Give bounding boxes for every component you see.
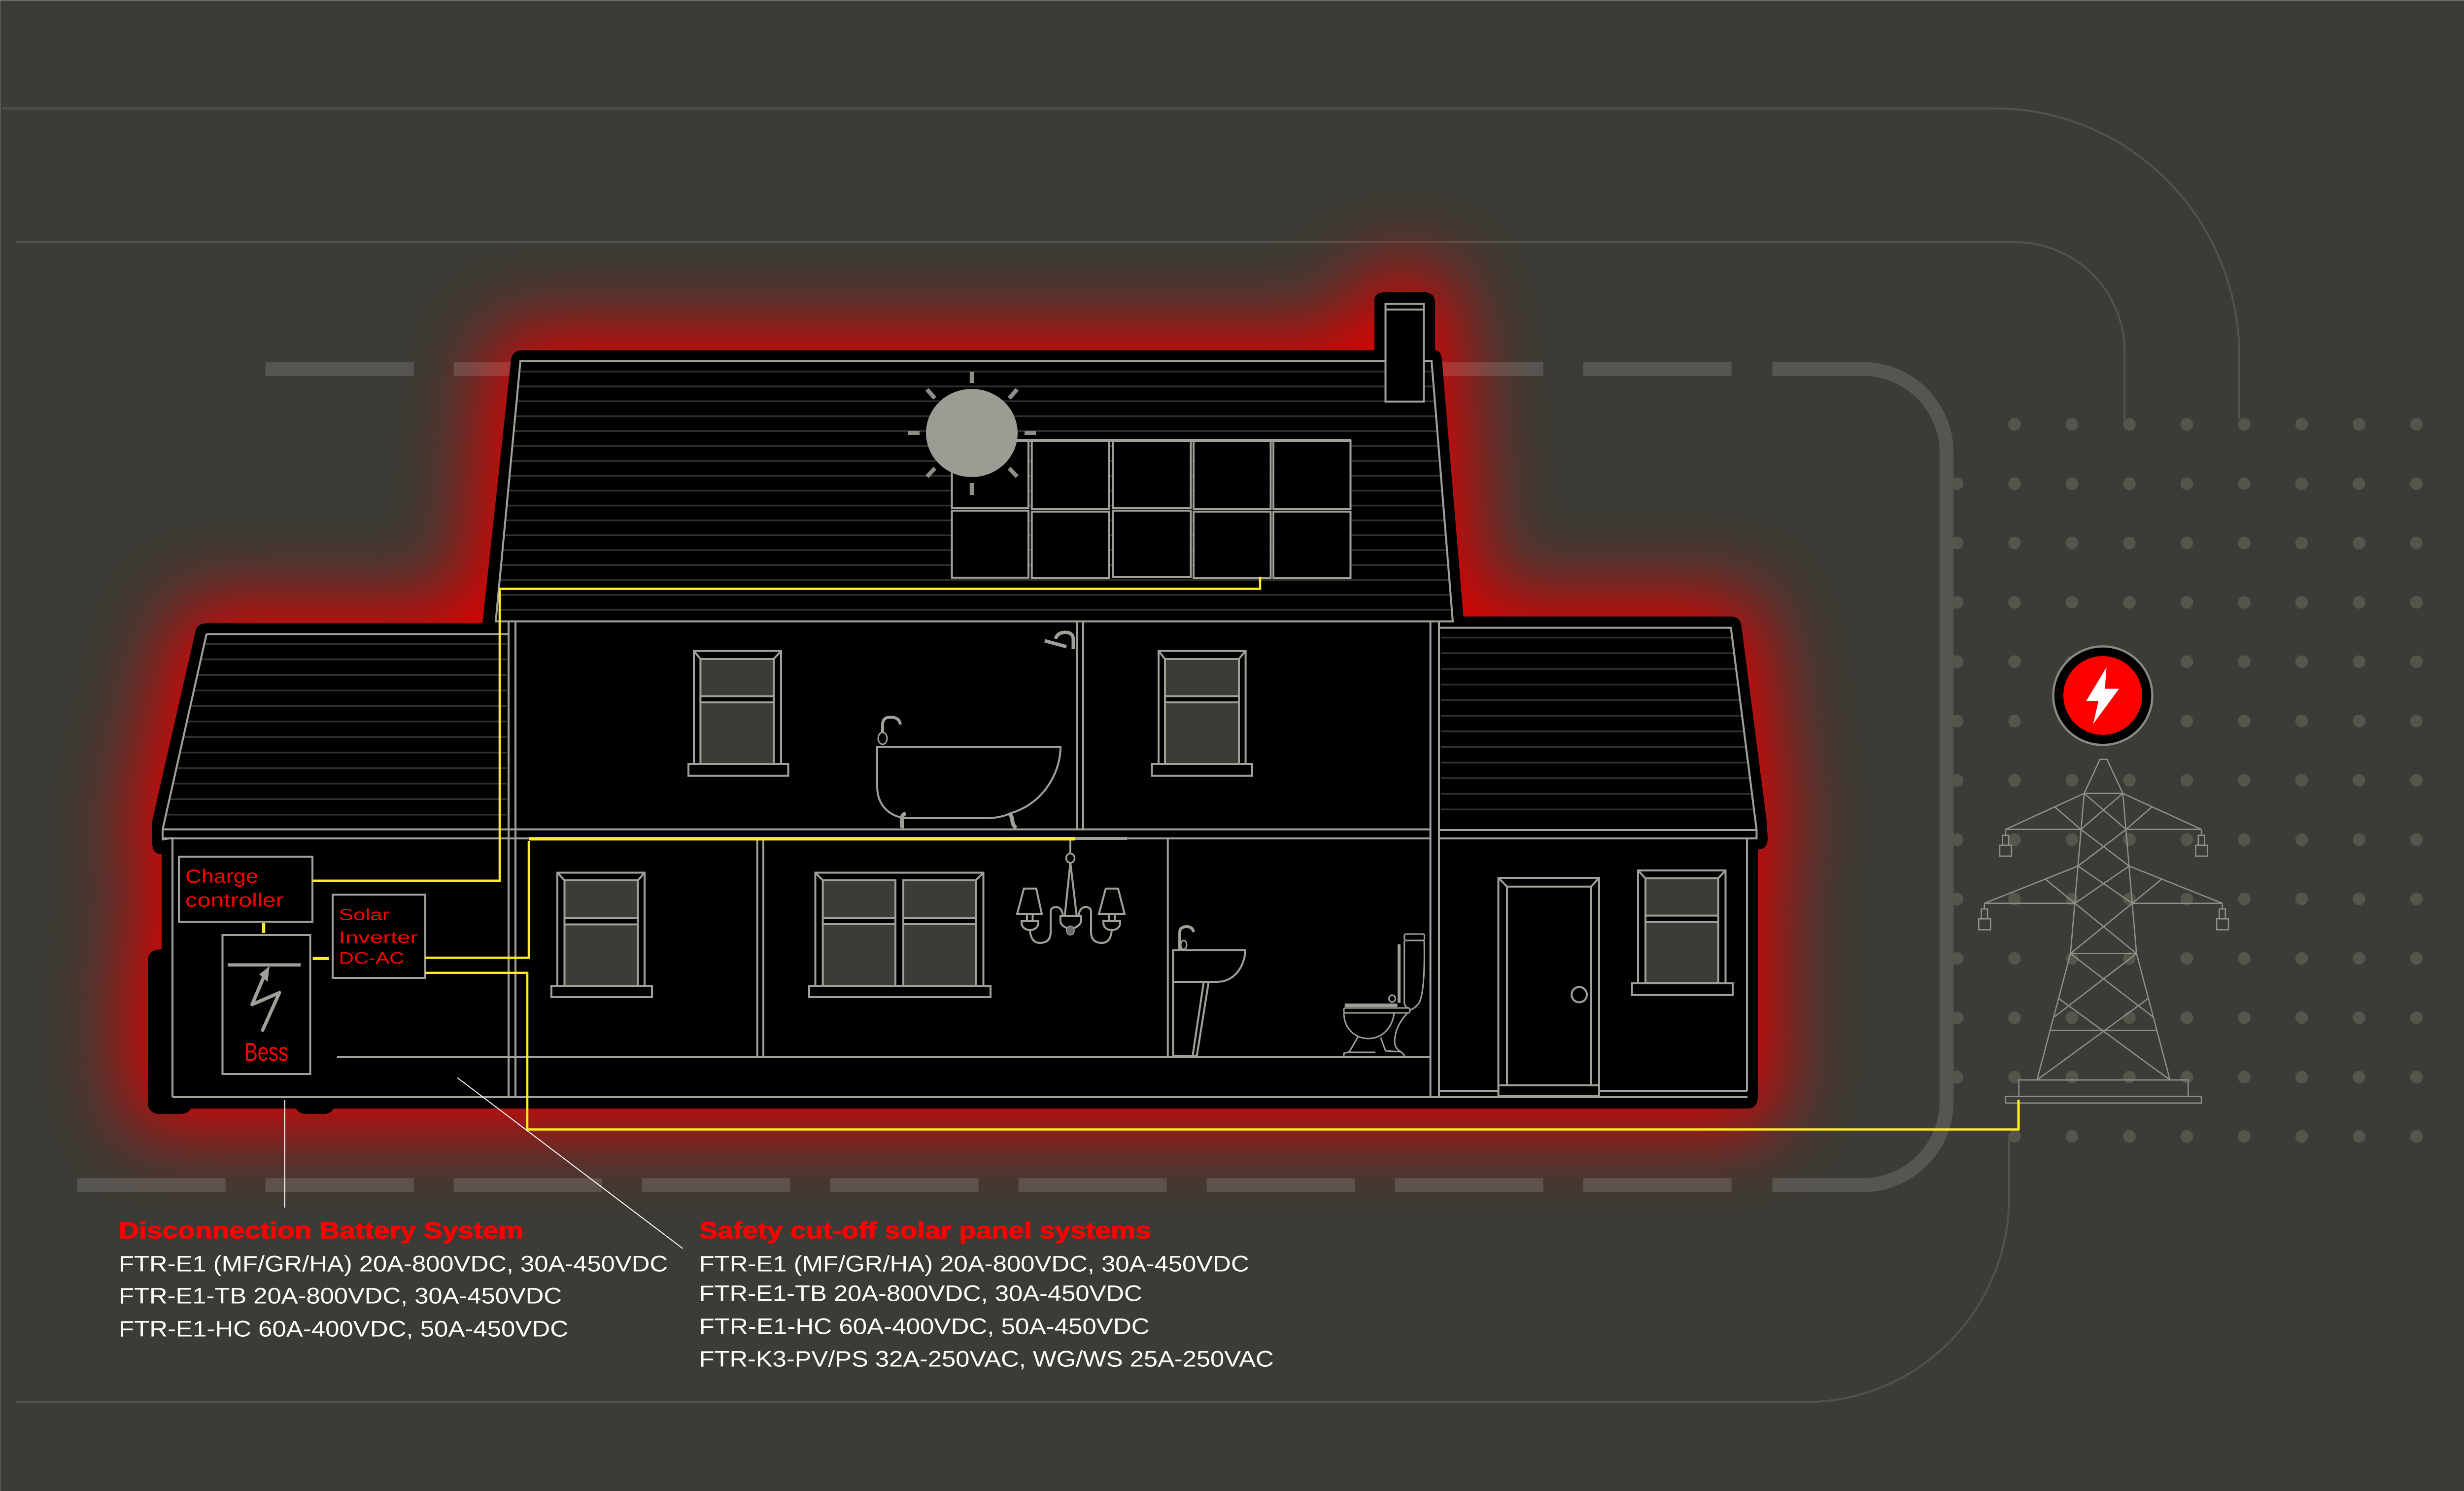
window: upper left	[688, 651, 788, 776]
grid connection wire	[2018, 1100, 2019, 1130]
icon: power badge	[2053, 646, 2153, 745]
text block: disconnection battery system	[119, 1217, 668, 1342]
panel: solar inverter: Solar	[339, 905, 390, 924]
chandelier	[1015, 837, 1127, 943]
panel: solar inverter	[333, 895, 425, 978]
text block: disconnection battery system: FTR-E1-HC 60A-400VDC, 50A-450VDC	[119, 1317, 568, 1342]
shower head	[1045, 632, 1073, 649]
window: lower left	[551, 872, 652, 997]
icon: battery bolt	[252, 966, 279, 1030]
text block: disconnection battery system: Disconnection Battery System	[119, 1217, 523, 1244]
road	[77, 369, 1947, 1185]
house structure lines	[163, 361, 1756, 1097]
window: lower double	[809, 872, 991, 997]
right roof shingles	[1441, 638, 1759, 809]
transmission tower	[1979, 760, 2228, 1103]
panel: charge controller	[179, 857, 312, 922]
panel: solar inverter: Inverter	[339, 928, 418, 946]
panel: battery storage	[223, 935, 310, 1074]
text block: safety cut-off solar panel systems	[699, 1217, 1274, 1372]
red glow around house	[148, 292, 1768, 1109]
street line: bottom	[16, 1137, 2009, 1402]
door	[1498, 878, 1599, 1097]
text block: safety cut-off solar panel systems: FTR-E1-HC 60A-400VDC, 50A-450VDC	[699, 1314, 1150, 1339]
leader line: solar	[457, 1077, 683, 1248]
text block: safety cut-off solar panel systems: FTR-E1 (MF/GR/HA) 20A-800VDC, 30A-450VDC	[699, 1251, 1249, 1276]
street line: inner top	[16, 242, 2124, 420]
leader line: battery	[284, 1100, 285, 1208]
street line: outer top	[2, 108, 2239, 419]
text block: safety cut-off solar panel systems: Safety cut-off solar panel systems	[699, 1217, 1151, 1244]
text block: disconnection battery system: FTR-E1-TB 20A-800VDC, 30A-450VDC	[119, 1283, 562, 1308]
house silhouette	[148, 292, 1768, 1114]
sink	[1173, 927, 1245, 1056]
icon: sun	[908, 372, 1036, 495]
solar panels	[952, 441, 1351, 578]
dot grid	[1928, 395, 2464, 1166]
panel: solar inverter: DC-AC	[339, 949, 404, 967]
left roof shingles	[158, 644, 507, 815]
panel: charge controller: Charge	[185, 866, 258, 887]
window: right wing	[1632, 870, 1733, 995]
window: upper right	[1152, 651, 1252, 776]
panel: charge controller: controller	[185, 890, 284, 911]
main roof shingles	[493, 372, 1459, 610]
text block: safety cut-off solar panel systems: FTR-K3-PV/PS 32A-250VAC, WG/WS 25A-250VAC	[699, 1347, 1274, 1372]
text block: disconnection battery system: FTR-E1 (MF/GR/HA) 20A-800VDC, 30A-450VDC	[119, 1251, 668, 1276]
panel: battery storage: Bess	[244, 1038, 288, 1067]
wiring	[264, 577, 2019, 1130]
chimney	[1386, 304, 1424, 402]
text block: safety cut-off solar panel systems: FTR-E1-TB 20A-800VDC, 30A-450VDC	[699, 1281, 1142, 1306]
bathtub	[877, 717, 1061, 828]
toilet	[1344, 934, 1424, 1056]
